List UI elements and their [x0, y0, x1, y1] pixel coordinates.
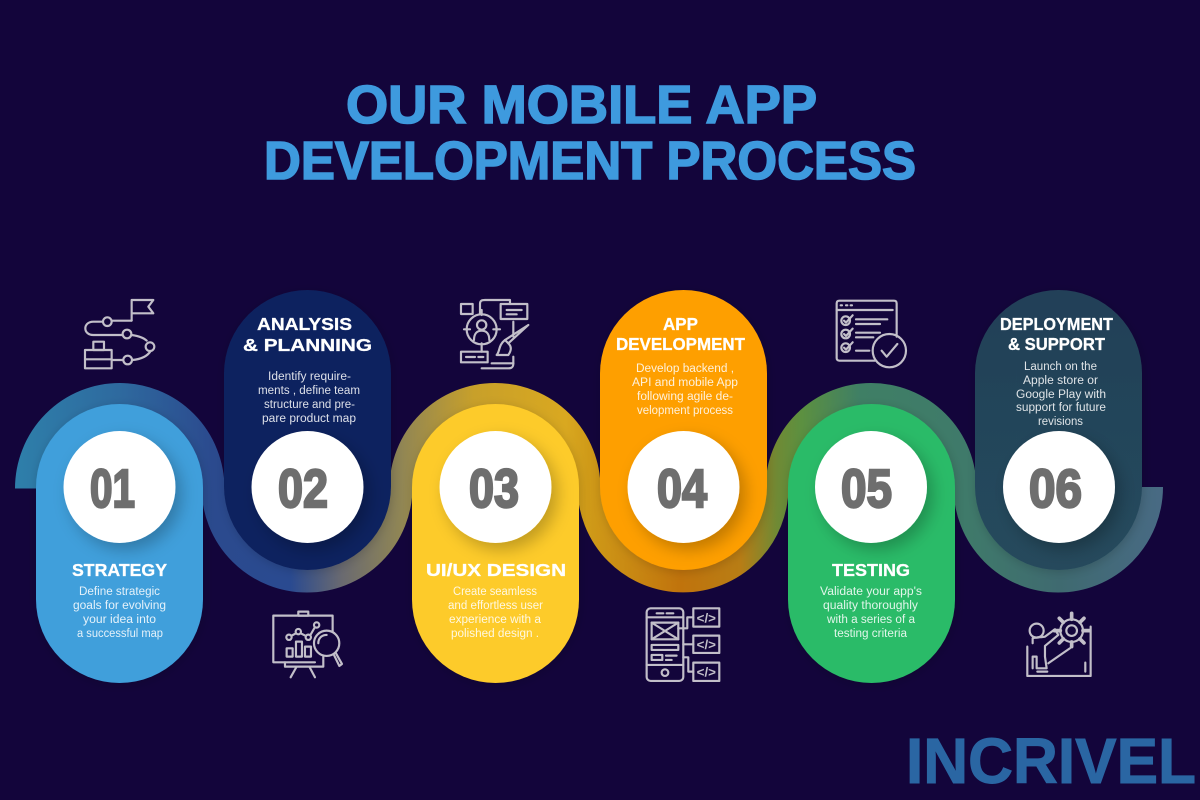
- panel: step 05 testing: [788, 404, 955, 683]
- panel: step 05 testing: TESTING: [832, 560, 910, 580]
- icon: roadmap flag: [85, 300, 154, 368]
- panel: step 03 ui/ux design: UI/UX DESIGN: [426, 560, 566, 580]
- panel: step 05 testing: quality thoroughly: [823, 600, 918, 612]
- panel: step 01 strategy: goals for evolving: [73, 600, 166, 612]
- panel: step 06 deployment and support: [975, 290, 1142, 570]
- panel: step 01 strategy: STRATEGY: [72, 560, 167, 580]
- title: DEVELOPMENT PROCESS: [264, 131, 916, 191]
- panel: step 06 deployment and support: support for future: [1016, 402, 1106, 414]
- panel: step 01 strategy: Define strategic: [79, 586, 160, 598]
- icon: app wireframe and code: </>: [697, 665, 716, 680]
- panel: step 06 deployment and support: Google Play with: [1016, 389, 1106, 401]
- icon: app wireframe and code: </>: [697, 637, 716, 652]
- icon: person pushing gear: [1027, 613, 1091, 676]
- panel: step 02 analysis and planning: pare product map: [262, 413, 356, 425]
- panel: step 05 testing: testing criteria: [834, 628, 908, 640]
- panel: step 05 testing: Validate your app's: [820, 586, 922, 598]
- title: OUR MOBILE APP: [346, 75, 817, 135]
- panel: step 04 app development: following agile de-: [637, 391, 733, 403]
- panel: step 06 deployment and support: 06: [1029, 459, 1082, 519]
- panel: step 03 ui/ux design: polished design .: [451, 628, 539, 640]
- panel: step 03 ui/ux design: experience with a: [449, 614, 542, 626]
- panel: step 02 analysis and planning: ments , define team: [258, 385, 360, 397]
- panel: step 06 deployment and support: Apple store or: [1023, 375, 1098, 387]
- panel: step 04 app development: 04: [657, 459, 707, 519]
- panel: step 02 analysis and planning: [224, 290, 391, 570]
- icon: app wireframe and code: [647, 608, 719, 681]
- panel: step 03 ui/ux design: Create seamless: [453, 586, 537, 598]
- panel: step 03 ui/ux design: and effortless user: [448, 600, 543, 612]
- panel: step 04 app development: velopment process: [637, 405, 733, 417]
- panel: step 04 app development: APP: [663, 314, 698, 334]
- panel: step 03 ui/ux design: 03: [469, 459, 519, 519]
- panel: step 01 strategy: [36, 404, 203, 683]
- panel: step 04 app development: DEVELOPMENT: [616, 334, 745, 354]
- panel: step 02 analysis and planning: Identify require-: [268, 371, 351, 383]
- panel: step 04 app development: [600, 290, 767, 570]
- panel: step 05 testing: with a series of a: [826, 614, 916, 626]
- panel: step 06 deployment and support: Launch on the: [1024, 361, 1097, 373]
- panel: step 06 deployment and support: & SUPPORT: [1008, 334, 1105, 354]
- panel: step 05 testing: 05: [841, 459, 892, 519]
- icon: app wireframe and code: </>: [697, 610, 716, 625]
- title: [264, 75, 916, 191]
- panel: step 02 analysis and planning: 02: [278, 459, 328, 519]
- panel: step 04 app development: API and mobile App: [632, 377, 738, 389]
- panel: step 04 app development: Develop backend ,: [636, 363, 734, 375]
- panel: step 03 ui/ux design: [412, 404, 579, 683]
- panel: step 02 analysis and planning: structure and pre-: [264, 399, 355, 411]
- panel: step 06 deployment and support: revisions: [1038, 416, 1083, 428]
- panel: step 01 strategy: a successful map: [77, 628, 163, 640]
- panel: step 01 strategy: 01: [90, 459, 135, 519]
- wave ribbon: [26, 394, 1152, 581]
- panel: step 02 analysis and planning: ANALYSIS: [257, 314, 352, 334]
- icon: chart analysis: [273, 612, 342, 677]
- logo: INCRIVEL: [906, 725, 1196, 797]
- panel: step 02 analysis and planning: & PLANNING: [243, 335, 372, 355]
- icon: ux target and brush: [461, 300, 528, 368]
- panel: step 06 deployment and support: DEPLOYMENT: [1000, 314, 1113, 334]
- icon: test checklist: [837, 301, 906, 367]
- panel: step 01 strategy: your idea into: [83, 614, 156, 626]
